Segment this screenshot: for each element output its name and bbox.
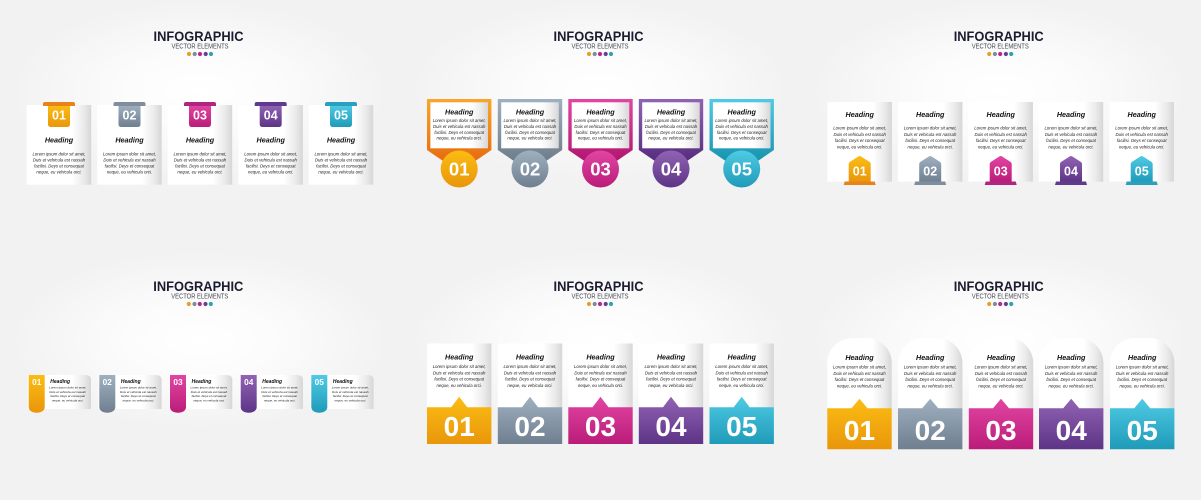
body text: Lorem ipsum dolor sit amet, — [715, 118, 768, 123]
body text: Lorem ipsum dolor sit amet, — [244, 151, 297, 156]
number: 05 — [726, 411, 757, 442]
body text: Duis et vehicula est nassah — [504, 124, 557, 129]
card 02 — [898, 338, 962, 449]
body text: neque, eu vehicula orci. — [719, 136, 764, 141]
heading: Heading — [586, 352, 615, 362]
body text: neque, eu vehicula orci. — [248, 170, 293, 175]
card 03 — [169, 375, 232, 413]
body text: Lorem ipsum dolor sit amet, — [1115, 126, 1168, 131]
card 02 — [498, 99, 562, 188]
body text: Lorem ipsum dolor sit amet, — [503, 118, 557, 123]
body text: Duis et vehicula est nassah — [433, 370, 486, 375]
number: 01 — [449, 158, 469, 180]
body text: neque, eu vehicula orci. — [334, 398, 366, 402]
title block: VECTOR ELEMENTS — [972, 294, 1029, 301]
body text: facilisi. Deys et consequat — [1117, 138, 1167, 143]
body text: neque, eu vehicula orci. — [648, 136, 694, 141]
card 05 — [1110, 338, 1174, 449]
body text: Lorem ipsum dolor sit amet, — [904, 126, 957, 131]
number: 05 — [1127, 415, 1158, 446]
body text: facilisi. Deys et consequat — [333, 394, 368, 398]
number: 04 — [661, 158, 682, 180]
number: 04 — [244, 377, 254, 387]
heading: Heading — [728, 108, 756, 116]
heading: Heading — [327, 136, 356, 144]
heading: Heading — [657, 352, 686, 362]
number circle — [441, 150, 478, 188]
number: 04 — [1064, 164, 1078, 178]
body text: facilisi. Deys et consequat — [976, 138, 1026, 143]
arrow badge — [844, 156, 876, 185]
body text: facilisi. Deys et consequat — [505, 376, 556, 381]
heading: Heading — [1057, 353, 1086, 362]
panel: bottom left infographic — [28, 278, 374, 413]
heading: Heading — [262, 379, 282, 385]
body text: Duis et vehicula est nassah — [1116, 132, 1168, 137]
number: 04 — [655, 411, 687, 442]
body text: Lorem ipsum dolor sit amet, — [503, 364, 557, 369]
body text: facilisi. Deys et consequat — [576, 376, 626, 381]
number: 04 — [264, 108, 278, 122]
number block with pointer — [1110, 399, 1174, 449]
number block with pointer — [969, 399, 1033, 449]
card 02 — [97, 102, 162, 185]
body text: Duis et vehicula est nassah — [975, 132, 1027, 137]
body text: facilisi. Deys et consequat — [434, 376, 485, 381]
heading: Heading — [1057, 110, 1086, 119]
heading: Heading — [1128, 353, 1157, 362]
card 03 — [568, 99, 633, 188]
body text: Duis et vehicula est nassah — [332, 390, 369, 394]
panel: top right infographic — [827, 28, 1174, 185]
arrow badge — [914, 156, 946, 185]
body text: Duis et vehicula est nassah — [975, 371, 1028, 376]
title block: INFOGRAPHIC — [954, 278, 1044, 294]
arrow badge — [1126, 156, 1158, 185]
body text: Lorem ipsum dolor sit amet, — [574, 118, 627, 123]
body text: Duis et vehicula est nassah — [1045, 132, 1098, 137]
body text: facilisi. Deys et consequat — [434, 130, 485, 135]
body text: Lorem ipsum dolor sit amet, — [332, 386, 369, 390]
body text: facilisi. Deys et consequat — [34, 164, 85, 169]
body text: facilisi. Deys et consequat — [646, 376, 697, 381]
card 05 — [309, 102, 373, 185]
number circle — [512, 150, 548, 188]
ribbon tab — [114, 102, 146, 127]
card 03 — [969, 338, 1033, 449]
body text: facilisi. Deys et consequat — [905, 138, 956, 143]
heading: Heading — [1128, 110, 1156, 119]
body text: facilisi. Deys et consequat — [175, 164, 226, 169]
panel: bottom middle infographic — [427, 278, 774, 444]
number tab — [311, 375, 327, 413]
body text: Lorem ipsum dolor sit amet, — [1116, 364, 1169, 369]
number: 03 — [590, 158, 611, 180]
body text: Duis et vehicula est nassah — [433, 124, 486, 129]
card 01 — [27, 102, 91, 185]
body text: neque, eu vehicula orci. — [908, 144, 953, 149]
title block — [554, 278, 644, 306]
body text: neque, eu vehicula orci. — [437, 136, 482, 141]
body text: Lorem ipsum dolor sit amet, — [715, 364, 768, 369]
heading: Heading — [516, 108, 545, 116]
body text: neque, eu vehicula orci. — [122, 398, 154, 402]
card 01 — [427, 344, 491, 444]
number: 03 — [985, 415, 1017, 446]
number: 03 — [193, 108, 207, 122]
body text: neque, eu vehicula orci. — [52, 398, 84, 402]
heading: Heading — [445, 352, 474, 362]
number: 02 — [123, 108, 136, 122]
heading: Heading — [192, 379, 211, 385]
heading: Heading — [916, 110, 945, 119]
body text: Duis et vehicula est nassah — [1045, 371, 1098, 376]
ribbon tab — [325, 102, 357, 127]
heading: Heading — [50, 379, 70, 385]
body text: Lorem ipsum dolor sit amet, — [261, 386, 298, 390]
number tab — [29, 375, 45, 413]
number circle — [582, 150, 619, 188]
number: 01 — [444, 411, 475, 442]
card 03 — [968, 102, 1033, 185]
heading: Heading — [257, 136, 285, 144]
body text: Lorem ipsum dolor sit amet, — [32, 151, 86, 156]
title block: INFOGRAPHIC — [154, 28, 244, 44]
body text: facilisi. Deys et consequat — [717, 130, 767, 135]
title block: VECTOR ELEMENTS — [171, 294, 229, 301]
heading: Heading — [846, 110, 874, 119]
card 03 — [568, 344, 633, 444]
body text: neque, eu vehicula orci. — [1120, 383, 1165, 388]
card 01 — [28, 375, 91, 413]
body text: neque, eu vehicula orci. — [107, 170, 152, 175]
number: 05 — [315, 377, 324, 387]
body text: facilisi. Deys et consequat — [1046, 377, 1097, 382]
title block: VECTOR ELEMENTS — [572, 44, 629, 51]
body text: Lorem ipsum dolor sit amet, — [103, 151, 156, 156]
body text: Duis et vehicula est nassah — [1116, 371, 1169, 376]
number block with pointer — [427, 397, 491, 444]
heading: Heading — [916, 353, 945, 362]
heading: Heading — [728, 352, 756, 362]
body text: Lorem ipsum dolor sit amet, — [974, 364, 1028, 369]
body text: neque, eu vehicula orci. — [978, 383, 1024, 388]
number block with pointer — [568, 397, 633, 444]
body text: neque, eu vehicula orci. — [507, 383, 553, 388]
ribbon tab — [184, 102, 216, 127]
body text: Duis et vehicula est nassah — [504, 370, 557, 375]
body text: facilisi. Deys et consequat — [1117, 377, 1168, 382]
number: 02 — [514, 411, 546, 442]
title block — [554, 28, 644, 56]
number: 04 — [1056, 415, 1087, 446]
body text: Lorem ipsum dolor sit amet, — [49, 386, 86, 390]
number: 01 — [853, 164, 867, 178]
heading: Heading — [445, 108, 474, 116]
body text: Duis et vehicula est nassah — [191, 390, 228, 394]
body text: Lorem ipsum dolor sit amet, — [833, 126, 886, 131]
body text: Lorem ipsum dolor sit amet, — [433, 118, 486, 123]
number: 03 — [994, 164, 1008, 178]
body text: Lorem ipsum dolor sit amet, — [120, 386, 157, 390]
card 04 — [639, 99, 703, 188]
number block with pointer — [827, 399, 892, 449]
heading: Heading — [186, 136, 215, 144]
card 04 — [1039, 102, 1103, 185]
body text: neque, eu vehicula orci. — [177, 170, 223, 175]
number tab — [241, 375, 257, 413]
card 05 — [1109, 102, 1174, 185]
title block: VECTOR ELEMENTS — [972, 44, 1029, 51]
number block with pointer — [498, 397, 562, 444]
heading: Heading — [333, 379, 353, 385]
title block: VECTOR ELEMENTS — [572, 294, 629, 301]
card 02 — [98, 375, 162, 413]
card 04 — [240, 375, 303, 413]
body text: Duis et vehicula est nassah — [904, 371, 957, 376]
body text: facilisi. Deys et consequat — [50, 394, 85, 398]
body text: facilisi. Deys et consequat — [646, 130, 697, 135]
body text: Duis et vehicula est nassah — [716, 124, 768, 129]
body text: facilisi. Deys et consequat — [717, 376, 767, 381]
body text: Duis et vehicula est nassah — [574, 370, 627, 375]
body text: neque, eu vehicula orci. — [264, 398, 296, 402]
number block with pointer — [710, 397, 774, 444]
body text: neque, eu vehicula orci. — [908, 383, 953, 388]
body text: Duis et vehicula est nassah — [904, 132, 957, 137]
body text: Lorem ipsum dolor sit amet, — [1045, 364, 1098, 369]
title block: INFOGRAPHIC — [954, 28, 1044, 44]
number: 01 — [52, 108, 66, 122]
body text: Lorem ipsum dolor sit amet, — [974, 126, 1027, 131]
body text: Lorem ipsum dolor sit amet, — [644, 118, 698, 123]
card 01 — [827, 102, 892, 185]
title block — [153, 278, 243, 306]
body text: facilisi. Deys et consequat — [1046, 138, 1097, 143]
body text: Duis et vehicula est nassah — [645, 124, 698, 129]
body text: facilisi. Deys et consequat — [835, 377, 885, 382]
body text: Duis et vehicula est nassah — [833, 371, 886, 376]
body text: neque, eu vehicula orci. — [719, 383, 764, 388]
number: 02 — [915, 415, 946, 446]
title block — [954, 278, 1044, 306]
card 04 — [238, 102, 303, 185]
heading: Heading — [987, 353, 1016, 362]
body text: neque, eu vehicula orci. — [978, 144, 1023, 149]
card 01 — [827, 338, 892, 449]
body text: neque, eu vehicula orci. — [578, 136, 623, 141]
body text: Lorem ipsum dolor sit amet, — [833, 364, 886, 369]
card 02 — [498, 344, 562, 444]
card 01 — [427, 99, 491, 188]
body text: facilisi. Deys et consequat — [121, 394, 156, 398]
body text: Duis et vehicula est nassah — [261, 390, 298, 394]
body text: Lorem ipsum dolor sit amet, — [644, 364, 698, 369]
number: 05 — [1135, 164, 1149, 178]
title block: VECTOR ELEMENTS — [172, 44, 229, 51]
body text: neque, eu vehicula orci. — [578, 383, 623, 388]
heading: Heading — [121, 379, 141, 385]
body text: Duis et vehicula est nassah — [103, 158, 156, 163]
body text: Duis et vehicula est nassah — [315, 158, 368, 163]
card 05 — [310, 375, 374, 413]
body text: neque, eu vehicula orci. — [193, 398, 225, 402]
number circle — [723, 150, 760, 188]
card 03 — [168, 102, 232, 185]
title block — [154, 28, 244, 56]
number: 03 — [585, 411, 616, 442]
body text: facilisi. Deys et consequat — [262, 394, 297, 398]
arrow badge — [1055, 156, 1087, 185]
body text: Lorem ipsum dolor sit amet, — [173, 151, 227, 156]
number block with pointer — [1039, 399, 1103, 449]
heading: Heading — [987, 110, 1015, 119]
number tab — [99, 375, 115, 413]
ribbon tab — [43, 102, 75, 127]
body text: neque, eu vehicula orci. — [36, 170, 82, 175]
number: 02 — [520, 158, 540, 180]
body text: Duis et vehicula est nassah — [120, 390, 157, 394]
number: 01 — [32, 377, 42, 387]
body text: Lorem ipsum dolor sit amet, — [190, 386, 228, 390]
body text: facilisi. Deys et consequat — [505, 130, 556, 135]
heading: Heading — [586, 108, 615, 116]
body text: Duis et vehicula est nassah — [834, 132, 886, 137]
body text: Lorem ipsum dolor sit amet, — [314, 151, 368, 156]
body text: facilisi. Deys et consequat — [905, 377, 956, 382]
body text: neque, eu vehicula orci. — [1049, 383, 1094, 388]
card 02 — [898, 102, 962, 185]
number tab — [170, 375, 186, 413]
body text: neque, eu vehicula orci. — [437, 383, 482, 388]
body text: facilisi. Deys et consequat — [316, 164, 367, 169]
body text: Duis et vehicula est nassah — [645, 370, 698, 375]
card 04 — [1039, 338, 1103, 449]
number: 03 — [173, 377, 183, 387]
panel: top middle infographic — [427, 28, 774, 188]
number circle — [652, 150, 690, 188]
body text: facilisi. Deys et consequat — [976, 377, 1027, 382]
number: 05 — [334, 108, 348, 122]
body text: facilisi. Deys et consequat — [246, 164, 296, 169]
number block with pointer — [639, 397, 703, 444]
body text: Duis et vehicula est nassah — [574, 124, 627, 129]
body text: Lorem ipsum dolor sit amet, — [433, 364, 486, 369]
body text: neque, eu vehicula orci. — [648, 383, 694, 388]
panel: bottom right infographic — [827, 278, 1174, 449]
body text: neque, eu vehicula orci. — [837, 144, 882, 149]
number: 02 — [923, 164, 937, 178]
body text: neque, eu vehicula orci. — [837, 383, 882, 388]
body text: facilisi. Deys et consequat — [835, 138, 885, 143]
body text: neque, eu vehicula orci. — [507, 136, 553, 141]
heading: Heading — [115, 136, 144, 144]
body text: Lorem ipsum dolor sit amet, — [574, 364, 627, 369]
heading: Heading — [516, 352, 545, 362]
title block — [954, 28, 1044, 56]
body text: neque, eu vehicula orci. — [1048, 144, 1094, 149]
body text: Duis et vehicula est nassah — [33, 158, 86, 163]
body text: neque, eu vehicula orci. — [1119, 144, 1164, 149]
number: 01 — [844, 415, 875, 446]
card 05 — [710, 99, 774, 188]
body text: Duis et vehicula est nassah — [174, 158, 227, 163]
title block: INFOGRAPHIC — [554, 278, 644, 294]
title block: INFOGRAPHIC — [554, 28, 644, 44]
body text: Lorem ipsum dolor sit amet, — [1044, 126, 1098, 131]
card 04 — [639, 344, 703, 444]
number: 05 — [731, 158, 752, 180]
panel: top left infographic — [27, 28, 373, 185]
body text: facilisi. Deys et consequat — [105, 164, 155, 169]
number: 02 — [103, 377, 112, 387]
body text: Duis et vehicula est nassah — [49, 390, 86, 394]
heading: Heading — [657, 108, 686, 116]
title block: INFOGRAPHIC — [153, 278, 243, 294]
body text: Lorem ipsum dolor sit amet, — [904, 364, 957, 369]
arrow badge — [985, 156, 1017, 185]
body text: neque, eu vehicula orci. — [318, 170, 364, 175]
ribbon tab — [255, 102, 287, 127]
number block with pointer — [898, 399, 962, 449]
heading: Heading — [845, 353, 874, 362]
body text: Duis et vehicula est nassah — [245, 158, 297, 163]
body text: Duis et vehicula est nassah — [716, 370, 768, 375]
heading: Heading — [45, 136, 74, 144]
body text: facilisi. Deys et consequat — [192, 394, 227, 398]
body text: facilisi. Deys et consequat — [576, 130, 626, 135]
card 05 — [710, 344, 774, 444]
